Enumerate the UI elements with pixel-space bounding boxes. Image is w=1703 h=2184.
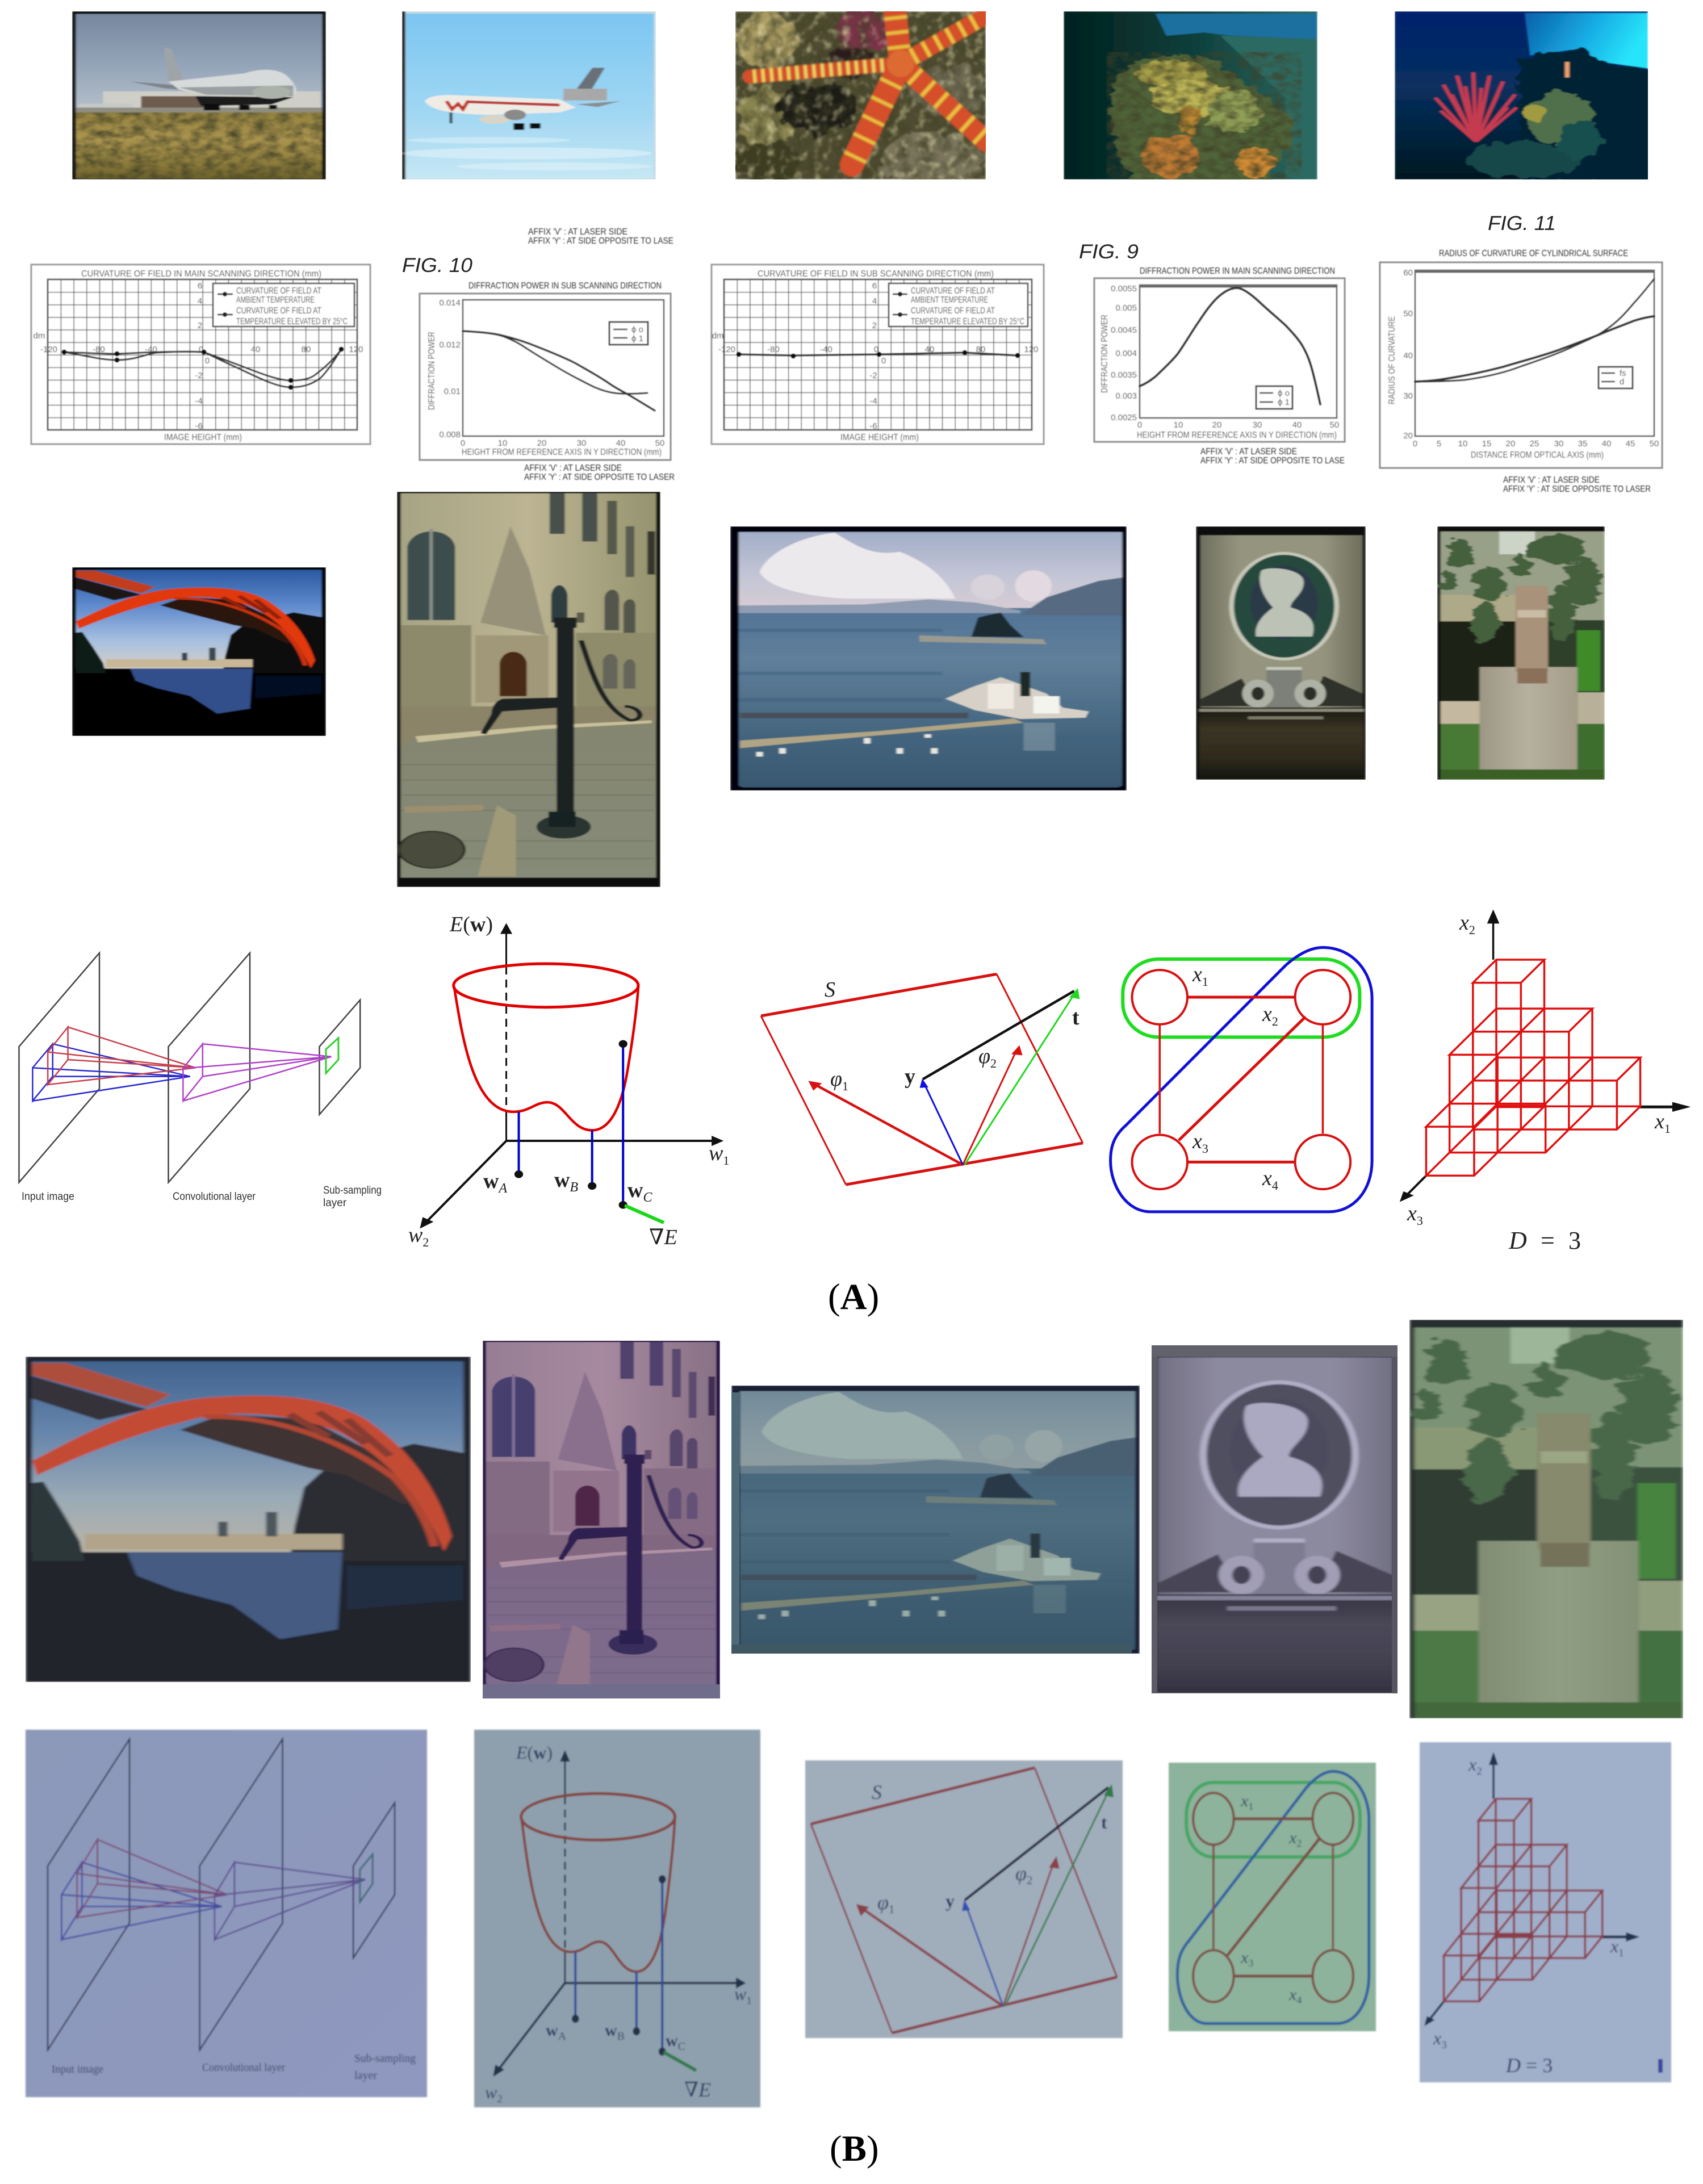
figure caption: laser side note above fig 10: AFFIX 'V' : AT LASER SIDE [528, 227, 627, 237]
chart: curvature of field, main scanning direction: 40 [251, 345, 260, 354]
chart: diffraction power in sub scanning direction: 0.01 [444, 387, 461, 396]
photo: captured red arch bridge [26, 1357, 471, 1682]
panel: captured convolutional network diagram: Convolutional layer [202, 2061, 285, 2074]
chart: curvature of field, sub scanning direction: -40 [820, 345, 832, 354]
diagram: graph with hyperedges: x [1192, 963, 1202, 986]
chart: curvature of field, sub scanning direction: 0 [881, 356, 886, 366]
diagram: error surface E(w): C [643, 1190, 652, 1205]
diagram: error surface E(w) [408, 913, 729, 1249]
diagram: error surface E(w): E(w) [449, 913, 493, 936]
chart: curvature of field, main scanning direction: CURVATURE OF FIELD IN MAIN SCANNING DIRECTION (mm) [81, 269, 321, 279]
panel: captured convolutional network diagram [26, 1730, 427, 2097]
diagram: error surface E(w): A [497, 1181, 507, 1196]
chart: radius of curvature of cylindrical surface: fs [1620, 369, 1626, 378]
panel: captured error surface diagram: A [558, 2030, 567, 2043]
panel: captured plane S diagram: φ [1015, 1862, 1027, 1885]
photo: jumbo jet on runway [72, 11, 326, 179]
diagram: graph with hyperedges: 1 [1202, 974, 1208, 989]
chart: radius of curvature of cylindrical surface: 40 [1403, 351, 1413, 361]
panel: captured plane S diagram: y [945, 1890, 955, 1911]
diagram: graph with hyperedges [1111, 947, 1372, 1212]
diagram: convolutional network layers: Sub-sampling [323, 1185, 382, 1196]
chart: diffraction power in main scanning direction: 0.0045 [1111, 325, 1137, 335]
caption: (B): (B) [830, 2128, 879, 2169]
panel: captured error surface diagram: w [734, 1984, 747, 2004]
panel: captured hypergraph diagram: 3 [1248, 1957, 1253, 1969]
chart: curvature of field, main scanning direction: -40 [145, 345, 157, 354]
chart: diffraction power in main scanning direction: AFFIX 'Y' : AT SIDE OPPOSITE TO LASE [1200, 456, 1345, 466]
chart: diffraction power in main scanning direction: 30 [1253, 420, 1262, 430]
diagram: 3D lattice of cubes D = 3 [1400, 910, 1691, 1254]
panel: captured hypergraph diagram [1169, 1763, 1376, 2031]
chart: curvature of field, sub scanning direction: -4 [869, 396, 877, 406]
chart: curvature of field, main scanning direction: 0 [205, 356, 210, 366]
chart: radius of curvature of cylindrical surface: RADIUS OF CURVATURE [1387, 316, 1397, 404]
panel: captured error surface diagram: 1 [746, 1995, 752, 2007]
chart: curvature of field, main scanning direction: dm [34, 331, 45, 341]
chart: radius of curvature of cylindrical surface: d [1620, 377, 1624, 387]
panel: captured error surface diagram: w [485, 2082, 497, 2102]
chart: curvature of field, sub scanning direction: 6 [872, 281, 877, 291]
heading: FIG. 9: FIG. 9 [1079, 241, 1139, 263]
chart: curvature of field, main scanning direction: 0 [199, 345, 203, 354]
chart: diffraction power in sub scanning direction: 20 [537, 438, 546, 448]
chart: curvature of field, main scanning direction: IMAGE HEIGHT (mm) [164, 433, 242, 442]
chart: curvature of field, sub scanning direction: -80 [767, 345, 780, 354]
chart: diffraction power in sub scanning direction: 10 [498, 438, 507, 448]
panel: captured error surface diagram: E(w) [516, 1742, 553, 1763]
chart: diffraction power in main scanning direction: DIFFRACTION POWER [1100, 315, 1110, 393]
chart: radius of curvature of cylindrical surface: AFFIX 'Y' : AT SIDE OPPOSITE TO LASER [1503, 484, 1651, 494]
panel: captured cube lattice diagram: x [1433, 2028, 1441, 2048]
diagram: error surface E(w): w [554, 1168, 570, 1192]
panel: captured cube lattice diagram: x [1468, 1754, 1476, 1775]
chart: curvature of field, sub scanning direction: TEMPERATURE ELEVATED BY 25°C [911, 317, 1024, 327]
panel: captured plane S diagram: 2 [1027, 1873, 1032, 1887]
diagram: graph with hyperedges: x [1262, 1002, 1272, 1026]
chart: curvature of field, sub scanning direction: 80 [976, 345, 985, 354]
panel: captured hypergraph diagram: x [1288, 1985, 1297, 2004]
panel: captured convolutional network diagram: layer [354, 2069, 377, 2082]
chart: curvature of field, sub scanning direction: 120 [1024, 345, 1039, 354]
chart: diffraction power in sub scanning direction: AFFIX 'V' : AT LASER SIDE [524, 463, 622, 473]
chart: curvature of field, sub scanning direction: dm [712, 331, 723, 341]
chart: radius of curvature of cylindrical surface: 30 [1554, 439, 1563, 449]
photo: captured sea with islands [731, 1386, 1140, 1654]
chart: diffraction power in sub scanning direction: ϕ o [631, 325, 643, 334]
chart: curvature of field, sub scanning direction: 0 [874, 345, 878, 354]
chart: curvature of field, sub scanning direction: AMBIENT TEMPERATURE [911, 295, 988, 305]
panel: captured cube lattice diagram: 3 [1441, 2039, 1447, 2051]
panel: captured hypergraph diagram: 2 [1296, 1838, 1302, 1849]
photo: starfish on reef [735, 11, 986, 179]
chart: curvature of field, sub scanning direction: CURVATURE OF FIELD AT [911, 286, 995, 296]
chart: diffraction power in sub scanning direction: 0.012 [439, 340, 461, 350]
chart: radius of curvature of cylindrical surface: 50 [1650, 439, 1659, 449]
diagram: 3D lattice of cubes D = 3: D = 3 [1508, 1227, 1581, 1254]
photo: red fan coral with cyan water [1395, 11, 1648, 179]
chart: curvature of field, main scanning direction: 80 [302, 345, 311, 354]
panel: captured convolutional network diagram: Sub-sampling [354, 2052, 416, 2065]
chart: curvature of field, sub scanning direction: 4 [872, 296, 877, 306]
chart: diffraction power in sub scanning direction: 50 [655, 438, 664, 448]
chart: radius of curvature of cylindrical surface: AFFIX 'V' : AT LASER SIDE [1503, 475, 1600, 485]
panel: captured error surface diagram: w [546, 2021, 558, 2040]
chart: radius of curvature of cylindrical surface: 30 [1403, 391, 1413, 401]
chart: curvature of field, sub scanning direction: 40 [925, 345, 934, 354]
chart: radius of curvature of cylindrical surface: 60 [1403, 268, 1413, 278]
chart: diffraction power in main scanning direction: 0.0035 [1111, 370, 1137, 380]
panel: captured hypergraph diagram: 1 [1248, 1801, 1253, 1812]
panel: captured plane S diagram: 1 [889, 1902, 894, 1916]
diagram: 3D lattice of cubes D = 3: 1 [1664, 1122, 1671, 1136]
section A: test images [19, 10, 1691, 1317]
figure caption: laser side note above fig 10: AFFIX 'Y' : AT SIDE OPPOSITE TO LASE [528, 236, 673, 246]
chart: diffraction power in sub scanning direction: AFFIX 'Y' : AT SIDE OPPOSITE TO LASER [524, 472, 675, 482]
chart: curvature of field, sub scanning direction: -6 [869, 421, 877, 431]
diagram: convolutional network layers [19, 953, 382, 1209]
chart: diffraction power in sub scanning direction [420, 281, 675, 482]
chart: radius of curvature of cylindrical surface: 0 [1413, 439, 1417, 449]
diagram: 3D lattice of cubes D = 3: x [1459, 911, 1469, 935]
chart: curvature of field, main scanning direction: -120 [40, 345, 57, 354]
panel: captured error surface diagram: 2 [497, 2093, 503, 2105]
chart: radius of curvature of cylindrical surface: RADIUS OF CURVATURE OF CYLINDRICAL SURFACE [1439, 249, 1628, 258]
panel: captured plane S diagram: t [1101, 1812, 1107, 1832]
panel: captured cube lattice diagram: 2 [1476, 1765, 1482, 1777]
panel: captured cube lattice diagram: x [1610, 1936, 1618, 1956]
chart: diffraction power in sub scanning direction: HEIGHT FROM REFERENCE AXIS IN Y DIRECTION (mm) [462, 447, 662, 457]
chart: curvature of field, main scanning direction: CURVATURE OF FIELD AT [236, 286, 321, 296]
chart: diffraction power in main scanning direction: ϕ o [1278, 388, 1290, 398]
chart: diffraction power in main scanning direction: 0 [1137, 420, 1142, 430]
chart: diffraction power in sub scanning direction: DIFFRACTION POWER IN SUB SCANNING DIRECTION [468, 281, 662, 291]
diagram: 3D lattice of cubes D = 3: 2 [1469, 923, 1475, 937]
chart: radius of curvature of cylindrical surface: 40 [1602, 439, 1611, 449]
diagram: error surface E(w): 2 [422, 1235, 429, 1249]
diagram: graph with hyperedges: x [1192, 1129, 1202, 1153]
chart: curvature of field, sub scanning direction: CURVATURE OF FIELD AT [911, 306, 995, 316]
chart: curvature of field, sub scanning direction: -2 [869, 371, 877, 380]
panel: captured hypergraph diagram: x [1240, 1948, 1249, 1967]
diagram: plane S with vectors: φ [978, 1044, 990, 1068]
diagram: graph with hyperedges: 2 [1272, 1014, 1278, 1028]
chart: diffraction power in main scanning direction: HEIGHT FROM REFERENCE AXIS IN Y DIRECTION (mm) [1137, 430, 1337, 440]
panel: captured cube lattice diagram [1420, 1742, 1671, 2082]
heading: FIG. 10: FIG. 10 [402, 254, 473, 277]
chart: radius of curvature of cylindrical surface [1380, 249, 1662, 494]
chart: radius of curvature of cylindrical surface: 50 [1403, 309, 1413, 319]
chart: radius of curvature of cylindrical surface: 15 [1482, 439, 1491, 449]
chart: diffraction power in main scanning direction [1094, 266, 1345, 466]
chart: curvature of field, main scanning direction: -2 [195, 371, 203, 380]
photo: sea with islands [730, 526, 1127, 790]
photo: captured medallion plaque [1152, 1345, 1397, 1693]
diagram: plane S with vectors: φ [830, 1067, 842, 1091]
chart: diffraction power in main scanning direction: 10 [1174, 420, 1183, 430]
chart: diffraction power in main scanning direction: 0.004 [1115, 349, 1137, 358]
diagram: plane S with vectors: 2 [990, 1056, 997, 1070]
chart: diffraction power in main scanning direction: 50 [1330, 420, 1339, 430]
chart: curvature of field, main scanning direction: TEMPERATURE ELEVATED BY 25°C [236, 317, 348, 327]
photo: captured stone statue [1409, 1320, 1683, 1718]
chart: radius of curvature of cylindrical surface: DISTANCE FROM OPTICAL AXIS (mm) [1471, 450, 1604, 460]
diagram: plane S with vectors: y [905, 1065, 915, 1089]
diagram: graph with hyperedges: 3 [1202, 1141, 1208, 1156]
chart: curvature of field, main scanning direction: 6 [198, 281, 202, 291]
diagram: plane S with vectors: S [825, 978, 835, 1002]
photo: red arch bridge [72, 567, 326, 736]
chart: curvature of field, sub scanning direction [712, 265, 1044, 444]
photo: water pump in front of building [397, 492, 660, 887]
diagram: plane S with vectors [761, 974, 1083, 1185]
panel: captured plane S diagram: S [872, 1781, 882, 1804]
heading: FIG. 11: FIG. 11 [1488, 212, 1556, 235]
chart: diffraction power in main scanning direction: DIFFRACTION POWER IN MAIN SCANNING DIRECTION [1140, 266, 1335, 276]
caption: (A): (A) [828, 1277, 879, 1317]
diagram: 3D lattice of cubes D = 3: 3 [1417, 1214, 1423, 1228]
panel: captured hypergraph diagram: x [1288, 1829, 1297, 1847]
chart: diffraction power in sub scanning direction: 0.014 [439, 298, 461, 308]
diagram: graph with hyperedges: 4 [1272, 1178, 1278, 1193]
chart: curvature of field, main scanning direction: -6 [195, 421, 203, 431]
photo: airliner in flight [402, 11, 656, 179]
chart: curvature of field, main scanning direction [31, 265, 370, 444]
chart: diffraction power in main scanning direction: 0.005 [1115, 303, 1137, 313]
diagram: error surface E(w): ∇E [649, 1225, 677, 1249]
panel: captured convolutional network diagram: Input image [52, 2063, 103, 2076]
chart: diffraction power in main scanning direction: 0.003 [1115, 391, 1137, 401]
diagram: plane S with vectors: t [1072, 1006, 1079, 1030]
photo: captured water pump [483, 1341, 720, 1698]
diagram: error surface E(w): w [627, 1178, 643, 1202]
panel: captured hypergraph diagram: x [1240, 1792, 1249, 1810]
chart: curvature of field, main scanning direction: -4 [195, 396, 203, 406]
chart: curvature of field, main scanning direction: AMBIENT TEMPERATURE [236, 295, 315, 305]
chart: radius of curvature of cylindrical surface: 45 [1626, 439, 1635, 449]
chart: diffraction power in main scanning direction: AFFIX 'V' : AT LASER SIDE [1200, 447, 1297, 457]
chart: curvature of field, main scanning direction: 4 [198, 296, 202, 306]
chart: diffraction power in main scanning direction: 40 [1292, 420, 1302, 430]
chart: diffraction power in main scanning direction: 20 [1212, 420, 1221, 430]
chart: radius of curvature of cylindrical surface: 10 [1458, 439, 1467, 449]
chart: radius of curvature of cylindrical surface: 35 [1578, 439, 1587, 449]
chart: diffraction power in sub scanning direction: ϕ 1 [631, 334, 643, 344]
panel: captured hypergraph diagram: 4 [1296, 1994, 1302, 2006]
chart: diffraction power in sub scanning direction: 40 [616, 438, 625, 448]
panel: captured plane S diagram: φ [877, 1891, 889, 1914]
diagram: convolutional network layers: Input image [22, 1191, 74, 1203]
diagram: graph with hyperedges: x [1262, 1166, 1272, 1190]
photo: yellow coral under water [1064, 11, 1317, 179]
chart: curvature of field, main scanning direction: -80 [93, 345, 105, 354]
panel: captured error surface diagram: ∇E [684, 2078, 711, 2101]
diagram: error surface E(w): w [709, 1141, 723, 1165]
diagram: error surface E(w): w [408, 1223, 423, 1247]
chart: diffraction power in main scanning direction: 0.0055 [1111, 284, 1137, 294]
panel: captured error surface diagram [474, 1730, 760, 2107]
diagram: error surface E(w): B [570, 1180, 578, 1195]
panel: captured error surface diagram: C [678, 2040, 685, 2053]
chart: curvature of field, sub scanning direction: CURVATURE OF FIELD IN SUB SCANNING DIRECTION (mm) [758, 269, 994, 279]
diagram: plane S with vectors: 1 [842, 1079, 848, 1093]
diagram: convolutional network layers: Convolutional layer [173, 1191, 256, 1203]
chart: diffraction power in sub scanning direction: DIFFRACTION POWER [427, 332, 437, 410]
diagram: 3D lattice of cubes D = 3: x [1407, 1202, 1417, 1225]
diagram: 3D lattice of cubes D = 3: x [1654, 1110, 1664, 1133]
figure caption: laser side note above fig 10 [528, 227, 673, 246]
chart: diffraction power in main scanning direction: ϕ 1 [1278, 398, 1290, 407]
chart: radius of curvature of cylindrical surface: 20 [1506, 439, 1515, 449]
chart: diffraction power in main scanning direction: 0.0025 [1111, 413, 1137, 422]
panel: captured plane S diagram [805, 1760, 1123, 2038]
chart: curvature of field, main scanning direction: 120 [349, 345, 363, 354]
photo: stone statue in garden [1437, 526, 1605, 780]
panel: captured error surface diagram: w [666, 2031, 678, 2050]
chart: radius of curvature of cylindrical surface: 25 [1530, 439, 1539, 449]
chart: curvature of field, sub scanning direction: 2 [872, 321, 877, 330]
chart: curvature of field, main scanning direction: 2 [198, 321, 202, 330]
chart: curvature of field, main scanning direction: CURVATURE OF FIELD AT [236, 306, 321, 316]
panel: captured cube lattice diagram: D = 3 [1505, 2054, 1553, 2077]
panel: captured error surface diagram: B [617, 2030, 625, 2043]
chart: curvature of field, sub scanning direction: -120 [718, 345, 735, 354]
diagram: error surface E(w): w [483, 1169, 499, 1193]
chart: curvature of field, sub scanning direction: IMAGE HEIGHT (mm) [840, 433, 919, 442]
section B: captured images [26, 1320, 1683, 2169]
diagram: convolutional network layers: layer [323, 1197, 347, 1209]
chart: diffraction power in sub scanning direction: 30 [577, 438, 586, 448]
diagram: error surface E(w): 1 [723, 1153, 729, 1168]
panel: captured cube lattice diagram: 1 [1618, 1947, 1624, 1959]
chart: radius of curvature of cylindrical surface: 20 [1403, 431, 1413, 441]
chart: diffraction power in sub scanning direction: 0.008 [439, 430, 461, 440]
panel: captured error surface diagram: w [605, 2021, 617, 2040]
chart: diffraction power in sub scanning direction: 0 [461, 438, 465, 448]
chart: radius of curvature of cylindrical surface: 5 [1437, 439, 1441, 449]
photo: sculpted medallion plaque [1196, 526, 1366, 780]
